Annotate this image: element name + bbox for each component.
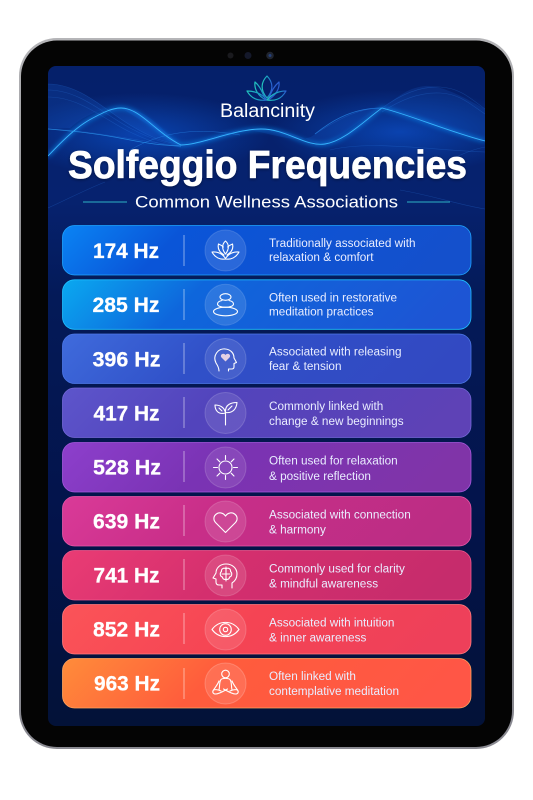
logo lotus [247, 76, 286, 100]
row: 963 Hz: contemplative meditation [269, 685, 399, 698]
row: 174 Hz: relaxation & comfort [269, 251, 374, 264]
row: 285 Hz: Often used in restorative [269, 292, 397, 304]
main wave line [48, 108, 485, 156]
row: 396 Hz [62, 334, 471, 384]
icon: stacked stones [214, 294, 238, 316]
brand name: Balancinity [220, 101, 316, 122]
title: Solfeggio Frequencies [68, 144, 467, 187]
background waves [48, 84, 485, 210]
row: 741 Hz [62, 550, 471, 600]
row: 528 Hz: 528 Hz [93, 456, 161, 480]
icon: heart [214, 513, 237, 532]
icon: lotus [212, 241, 239, 259]
row: 528 Hz: Often used for relaxation [269, 454, 398, 468]
row: 639 Hz: 639 Hz [93, 510, 160, 534]
row: 285 Hz [62, 280, 471, 329]
row: 741 Hz: & mindful awareness [269, 578, 378, 590]
icon: sun [214, 456, 238, 480]
row: 174 Hz: Traditionally associated with [269, 237, 416, 250]
icon: head with brain [213, 564, 237, 588]
row: 963 Hz: 963 Hz [94, 672, 160, 696]
row: 285 Hz: 285 Hz [92, 294, 160, 317]
row: 639 Hz: Associated with connection [269, 508, 411, 522]
row: 396 Hz: Associated with releasing [269, 346, 402, 358]
row: 639 Hz [62, 496, 471, 546]
icon: meditating figure [213, 670, 238, 694]
row: 396 Hz: fear & tension [269, 360, 342, 373]
icon: head with heart [215, 349, 236, 371]
screen [48, 66, 485, 726]
row: 396 Hz: 396 Hz [92, 348, 160, 372]
camera array [228, 52, 274, 59]
row: 852 Hz: Associated with intuition [269, 616, 394, 630]
icon: sprout [215, 402, 237, 425]
row: 852 Hz: 852 Hz [93, 618, 160, 642]
row: 528 Hz: & positive reflection [269, 470, 371, 483]
row: 417 Hz: change & new beginnings [269, 415, 404, 428]
row: 174 Hz: 174 Hz [93, 240, 159, 263]
row: 417 Hz: Commonly linked with [269, 400, 383, 413]
subtitle: Common Wellness Associations [135, 192, 398, 212]
icon: eye [212, 622, 239, 637]
main wave glow [48, 108, 485, 156]
row: 285 Hz: meditation practices [269, 306, 374, 319]
row: 639 Hz: & harmony [269, 524, 326, 536]
row: 741 Hz: 741 Hz [94, 564, 160, 588]
row: 741 Hz: Commonly used for clarity [269, 562, 405, 576]
wave mesh left [48, 84, 181, 145]
row: 852 Hz [62, 604, 471, 654]
row: 852 Hz: & inner awareness [269, 632, 366, 644]
row: 417 Hz [62, 388, 471, 438]
row: 963 Hz [62, 658, 471, 708]
row: 174 Hz [62, 226, 471, 275]
row: 528 Hz [62, 442, 471, 492]
row: 963 Hz: Often linked with [269, 670, 356, 683]
row: 417 Hz: 417 Hz [94, 402, 160, 426]
